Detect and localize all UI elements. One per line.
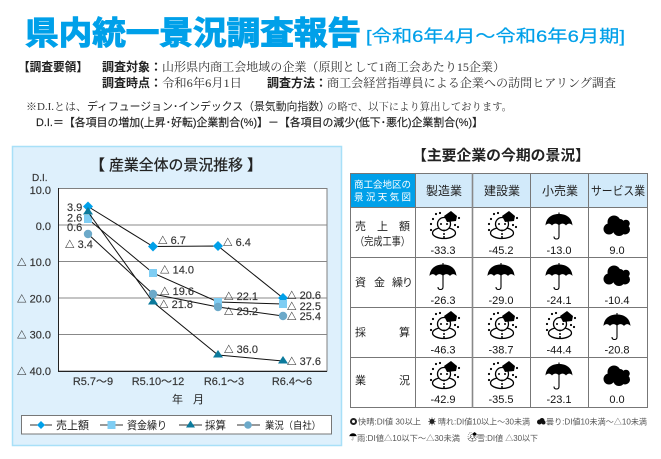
icon: clear <box>350 418 357 425</box>
icon: rain <box>349 433 357 440</box>
data labels: △ 22.5 <box>287 301 321 313</box>
D.I. note end: の略で、以下により算出しております。 <box>327 100 512 113</box>
table header: 商工会地区の <box>354 179 411 191</box>
y axis labels <box>17 185 51 378</box>
y axis labels: 10.0 <box>30 185 51 197</box>
x axis title: 年 月 <box>172 392 204 406</box>
D.I. formula: D.I.＝【各項目の増加(上昇･好転)企業割合(%)】－【各項目の減少(低下･悪化)企業割合(%)】 <box>36 115 483 129</box>
table header: 建設業 <box>484 184 520 198</box>
x axis labels: R5.10～12 <box>132 376 184 388</box>
row: business conditions: -42.9 <box>430 394 456 406</box>
data labels: △ 20.6 <box>287 290 321 302</box>
data labels: △ 25.4 <box>287 311 321 323</box>
table header: 景況天気図 <box>354 192 411 204</box>
line series: profitability <box>83 207 288 364</box>
row: cash flow: -10.4 <box>604 295 630 307</box>
data labels: △ 37.6 <box>287 356 321 368</box>
data labels: △ 6.4 <box>223 237 251 249</box>
row: sales: -13.0 <box>546 245 572 257</box>
row: business conditions: 0.0 <box>609 394 625 406</box>
row: sales: -33.3 <box>430 245 456 257</box>
row: sales: -45.2 <box>488 245 514 257</box>
data labels: △ 19.6 <box>160 286 194 298</box>
line series: cash flow <box>84 215 287 308</box>
subtitle: period: [令和6年4月～令和6年6月期] <box>366 27 625 46</box>
legend: snow: 雪:DI値 △30以下 <box>477 433 538 443</box>
survey outline <box>18 59 616 90</box>
y axis labels: △ 10.0 <box>17 257 51 269</box>
row: business conditions: 業況 <box>355 373 410 387</box>
panel: weather table <box>350 173 648 408</box>
row: profitability: -44.4 <box>546 344 572 356</box>
survey date: 調査時点： <box>102 75 162 90</box>
legend: rain: 雨:DI値△10以下～△30未満 <box>357 433 460 443</box>
row: business conditions: -23.1 <box>546 394 572 406</box>
table header: サービス業 <box>591 184 645 198</box>
y axis labels: 0.0 <box>36 221 51 233</box>
table grid <box>350 173 648 408</box>
chart title: 【 産業全体の景況推移 】 <box>90 157 262 174</box>
table header: 小売業 <box>542 183 578 198</box>
row: business conditions: -35.5 <box>488 394 514 406</box>
data labels: △ 22.1 <box>224 291 258 303</box>
D.I. note start: ※D.I.とは、 <box>26 101 87 113</box>
line series: business conditions <box>84 230 287 320</box>
row: cash flow <box>355 263 630 307</box>
row: sales: 売上額 <box>355 219 410 233</box>
data labels: 3.9 <box>67 202 82 214</box>
chart legend: 売上額 <box>56 418 89 432</box>
y axis labels: △ 40.0 <box>17 366 51 378</box>
row: sales: 9.0 <box>609 245 625 257</box>
x axis labels <box>73 376 312 388</box>
legend: cloudy: 曇り:DI値10未満～△10未満 <box>546 416 647 426</box>
chart legend: 採算 <box>205 418 226 432</box>
data labels: △ 36.0 <box>224 344 258 356</box>
table header: 製造業 <box>426 184 462 198</box>
chart legend: 業況（自社） <box>265 419 321 432</box>
y axis unit: D.I. <box>32 173 48 184</box>
title: 県内統一景況調査報告 <box>25 15 361 51</box>
row: sales <box>355 211 630 257</box>
survey target: 調査対象： <box>102 59 162 74</box>
data labels: △ 3.4 <box>65 239 93 251</box>
D.I. name: ディフュージョン･インデックス（景気動向指数） <box>87 99 330 113</box>
legend: sunny: 晴れ:DI値10以上～30未満 <box>438 416 530 426</box>
legend: clear: 快晴:DI値 30以上 <box>358 416 421 426</box>
data labels: △ 23.2 <box>224 306 258 318</box>
data labels: △ 14.0 <box>160 264 194 276</box>
row: cash flow: -29.0 <box>488 295 514 307</box>
data labels: △ 21.8 <box>159 299 193 311</box>
data labels: 2.6 <box>67 212 82 224</box>
y axis labels: △ 20.0 <box>17 294 51 306</box>
icon: cloudy <box>537 418 546 424</box>
row: profitability: -46.3 <box>430 344 456 356</box>
row: cash flow: 資金繰り <box>355 275 413 289</box>
row: cash flow: -26.3 <box>430 295 456 307</box>
x axis labels: R5.7～9 <box>73 376 113 388</box>
line series: sales <box>83 202 288 303</box>
survey method value: 商工会経営指導員による企業への訪問ヒアリング調査 <box>327 75 616 90</box>
chart legend <box>22 416 332 434</box>
icon: snow <box>468 432 478 441</box>
row: profitability <box>355 311 630 356</box>
row: profitability: -38.7 <box>488 344 514 356</box>
row: profitability: 採算 <box>355 325 410 339</box>
data labels: 0.6 <box>67 222 82 234</box>
survey outline heading: 【調査要領】 <box>18 59 88 74</box>
row: cash flow: -24.1 <box>546 295 572 307</box>
data labels <box>65 202 321 368</box>
row: profitability: -20.8 <box>604 344 630 356</box>
plot area <box>58 188 327 372</box>
weather legend <box>349 416 647 443</box>
row: business conditions <box>355 361 630 406</box>
x axis labels: R6.4～6 <box>272 376 312 388</box>
survey target value: 山形県内商工会地域の企業（原則として1商工会あたり15企業） <box>162 59 505 74</box>
panel: industry trend chart <box>12 146 342 446</box>
D.I. explanation <box>26 99 512 129</box>
row: sales: （完成工事） <box>355 235 410 248</box>
x axis labels: R6.1～3 <box>204 376 244 388</box>
icon: sunny <box>428 418 436 426</box>
chart legend: 資金繰り <box>127 418 167 432</box>
table heading: 【主要企業の今期の景況】 <box>412 146 590 164</box>
table header <box>350 173 647 208</box>
data labels: △ 6.7 <box>158 235 186 247</box>
y axis labels: △ 30.0 <box>17 330 51 342</box>
survey method: 調査方法： <box>267 75 327 90</box>
survey date value: 令和6年6月1日 <box>162 75 242 90</box>
